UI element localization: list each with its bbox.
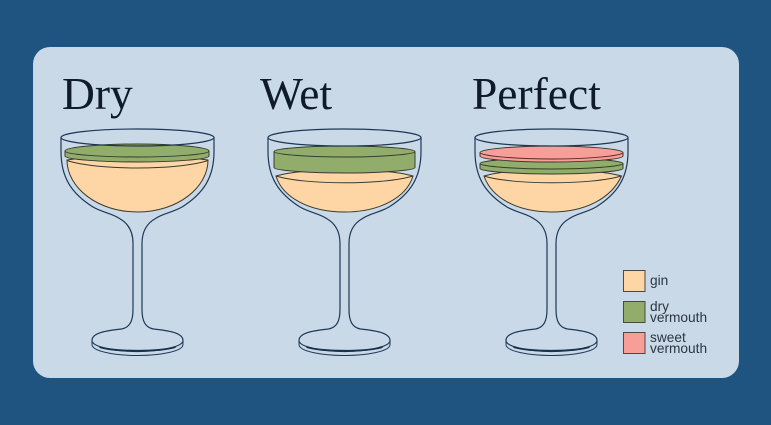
glass: Perfect (475, 129, 628, 356)
title: Perfect: Perfect (472, 68, 601, 119)
glass foot (299, 340, 390, 356)
label: sweet vermouth: vermouth (650, 341, 707, 356)
legend (624, 270, 707, 356)
swatch: gin (624, 270, 645, 292)
label: sweet vermouth: sweet (650, 330, 686, 345)
label: dry vermouth: vermouth (650, 310, 707, 325)
title: Wet: Wet (260, 68, 332, 119)
sweet vermouth layer (480, 146, 623, 162)
glass outline (268, 138, 421, 352)
title: Dry: Dry (62, 68, 133, 119)
glass: Wet (268, 129, 421, 356)
swatch: sweet vermouth (624, 332, 645, 354)
glass foot (506, 340, 597, 356)
dry vermouth layer (480, 158, 623, 174)
swatch: dry vermouth (624, 302, 645, 322)
gin layer (67, 157, 208, 212)
background panel (33, 47, 739, 378)
gin layer (484, 170, 622, 212)
dry vermouth layer (65, 144, 209, 162)
glass rim (268, 129, 421, 146)
glass outline (475, 138, 628, 352)
glass: Dry (61, 129, 214, 356)
label: dry vermouth: dry (650, 299, 669, 314)
glass rim (61, 129, 214, 146)
label: gin: gin (650, 273, 668, 288)
glass outline (61, 138, 214, 352)
dry vermouth layer (274, 146, 415, 173)
glass foot (92, 340, 183, 356)
gin layer (276, 170, 413, 212)
glass rim (475, 129, 628, 146)
